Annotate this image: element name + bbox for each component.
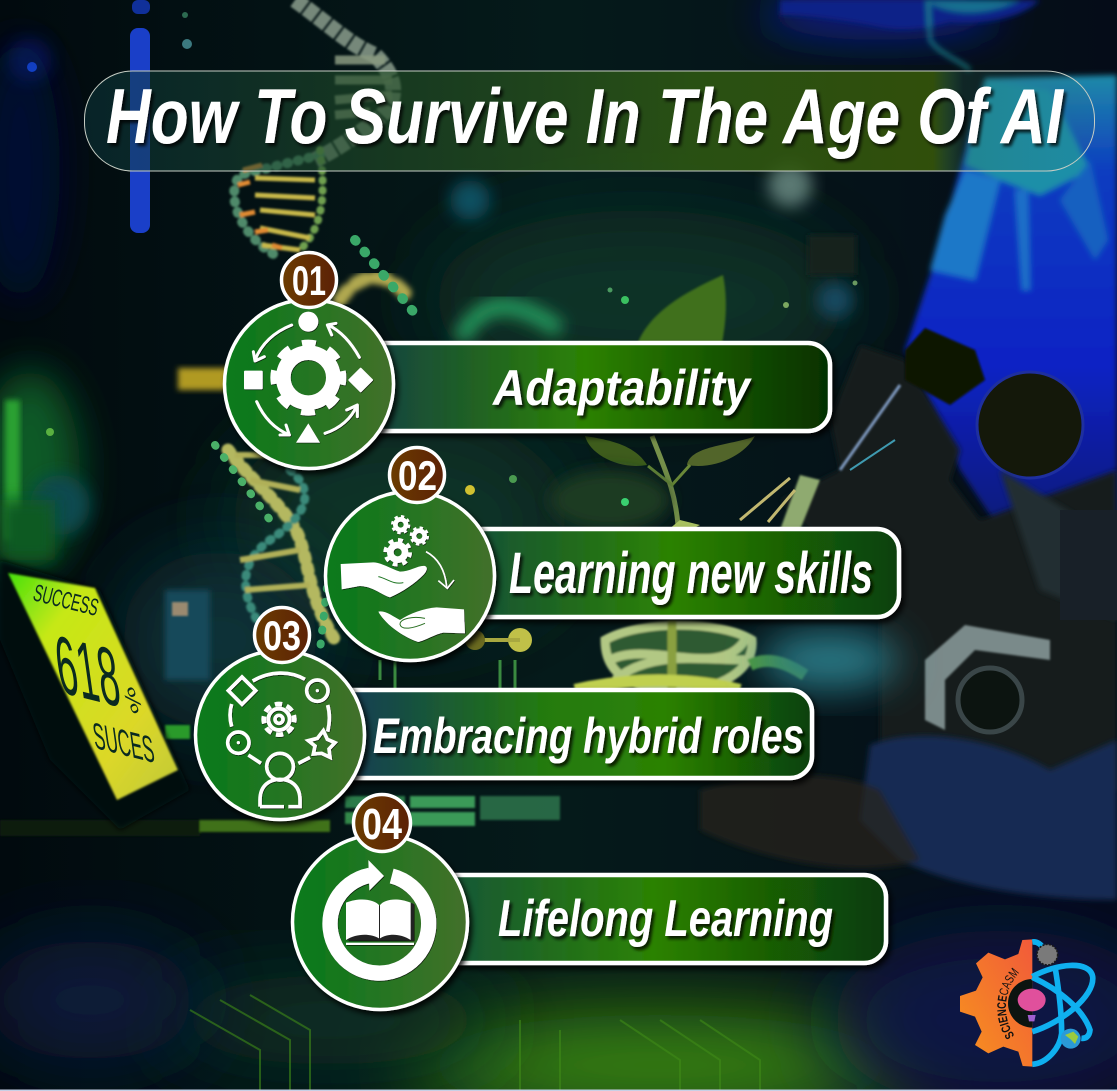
background: keyboard on lower bench (0, 796, 560, 836)
background: tablet showing success readout: SUCCESS (31, 580, 101, 622)
step 4: Lifelong Learning (292, 794, 886, 1010)
icon disc 3 (196, 650, 364, 820)
background: lab coat (905, 75, 1117, 560)
background: plant with leaves (550, 275, 755, 530)
step 3: Embracing hybrid roles (196, 608, 812, 820)
background: DNA sphere around plant (575, 620, 805, 690)
label bar 3 (320, 690, 812, 778)
logo brain with bulb (1018, 989, 1046, 1021)
background: tablet showing success readout (0, 560, 190, 830)
label bar 2: Learning new skills (509, 541, 873, 606)
bottom edge line (0, 1090, 1117, 1091)
number badge 01 (282, 252, 336, 308)
background: gloved hand and sleeve (700, 736, 1117, 900)
background: tablet showing success readout: 618 (49, 617, 125, 726)
icon: hands passing gears (341, 516, 465, 642)
icon: person with orbiting skills (228, 673, 335, 807)
title pill (84, 71, 1094, 171)
step 2: Learning new skills (326, 448, 899, 660)
background: lower DNA helix (228, 450, 335, 640)
logo atom orbits (1032, 942, 1093, 1064)
logo earth (1061, 1029, 1081, 1049)
logo wordmark: SCIENCECASM (997, 968, 1019, 1040)
icon: book in renewal arrow (330, 860, 429, 973)
logo gear half (960, 939, 1032, 1067)
background: cyan light beam (760, 632, 900, 688)
label bar 4: Lifelong Learning (498, 890, 833, 948)
icon disc 2 (326, 492, 494, 660)
icon disc 4 (292, 834, 468, 1010)
icon: gear with cycle of shapes (244, 312, 373, 443)
label bar 1 (340, 343, 830, 431)
background: upper DNA helix (234, 0, 393, 255)
number badge 01: 01 (292, 257, 326, 304)
label bar 4 (420, 875, 886, 963)
label bar 2 (440, 529, 899, 617)
label bar 3: Embracing hybrid roles (373, 708, 804, 764)
label bar 1: Adaptability (491, 360, 752, 416)
logo moon (1037, 944, 1058, 965)
background: circuit traces in bottom glow (190, 995, 760, 1091)
background: tablet showing success readout: % (118, 685, 146, 717)
background: goggles and head (780, 0, 1040, 70)
number badge 02: 02 (398, 452, 437, 499)
background: microscope (740, 328, 1117, 840)
logo dark core (1008, 979, 1032, 1028)
step 1: Adaptability (224, 252, 830, 468)
icon disc 1 (224, 300, 394, 468)
logo: ScienceCasm (960, 939, 1096, 1068)
number badge 04: 04 (362, 800, 402, 849)
number badge 03: 03 (263, 612, 301, 659)
background: scattered bokeh dots (0, 0, 858, 739)
background: tablet showing success readout: SUCES (90, 715, 157, 772)
